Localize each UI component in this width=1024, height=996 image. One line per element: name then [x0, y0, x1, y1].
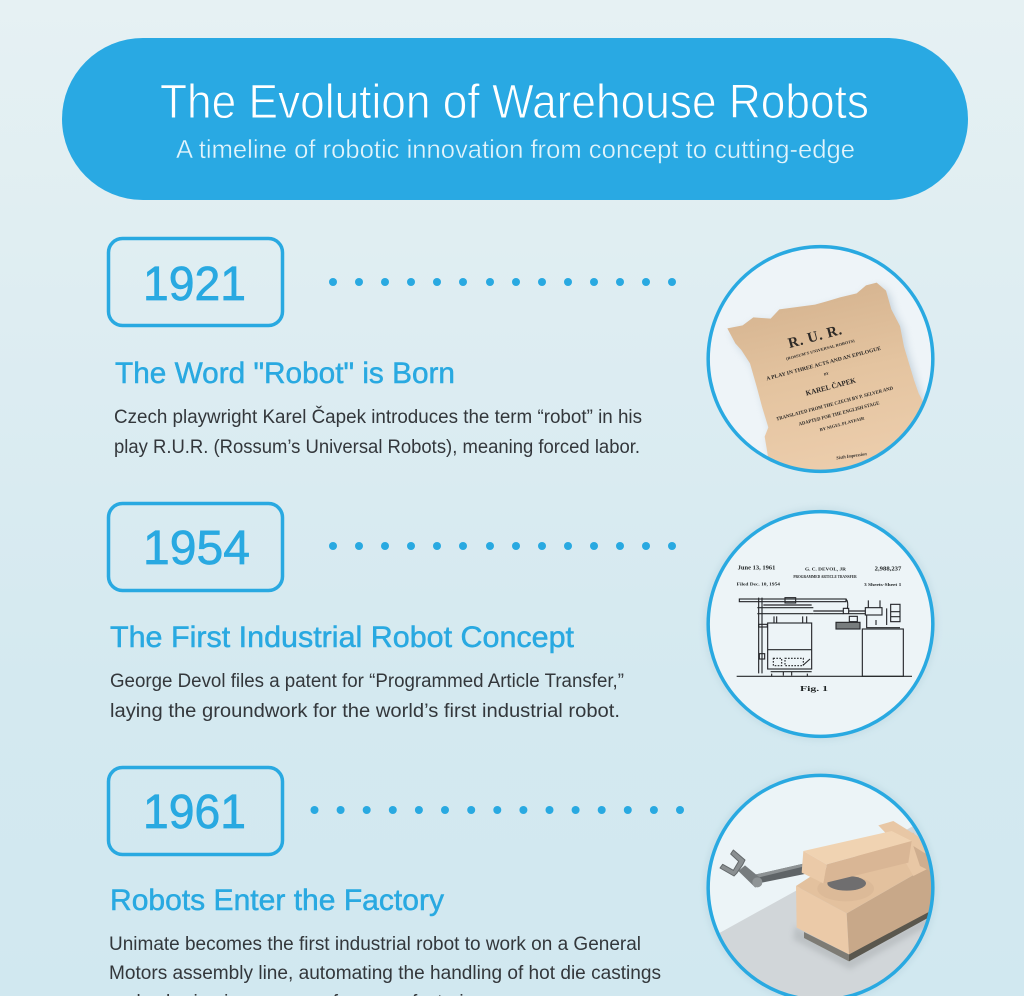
year badge 1921: 1921: [143, 258, 246, 311]
description 1954: [110, 671, 624, 722]
image: R.U.R. title page: [706, 244, 935, 474]
title banner: [62, 38, 968, 200]
image: patent drawing: Filed Dec. 10, 1954: [737, 582, 781, 587]
description 1954: laying the groundwork for the world’s first industrial robot.: [110, 701, 620, 722]
image: R.U.R. title page: ADAPTED FOR THE ENGLISH STAGE: [798, 401, 881, 428]
image: patent drawing: G. C. DEVOL, JR: [805, 567, 847, 572]
dotted connector 1921: [329, 278, 676, 286]
image: patent drawing: June 13, 1961: [738, 566, 775, 572]
dotted connector 1961: [310, 806, 684, 814]
base: [796, 886, 849, 954]
heading 1961: Robots Enter the Factory: [110, 884, 444, 917]
heading 1921: The Word "Robot" is Born: [115, 357, 455, 390]
floor: [713, 826, 940, 996]
description 1954: George Devol files a patent for “Programmed Article Transfer,”: [110, 671, 624, 692]
image: patent drawing: Fig. 1: [800, 684, 829, 693]
image: patent drawing: PROGRAMMED ARTICLE TRANSFER: [793, 574, 857, 579]
description 1921: play R.U.R. (Rossum’s Universal Robots), meaning forced labor.: [114, 437, 640, 458]
image: R.U.R. title page: A PLAY IN THREE ACTS AND AN EPILOGUE: [766, 346, 882, 382]
title: The Evolution of Warehouse Robots: [160, 76, 869, 129]
image: patent drawing: 2,988,237: [875, 565, 902, 572]
year badge 1961: [108, 768, 282, 854]
subtitle: A timeline of robotic innovation from concept to cutting-edge: [176, 134, 855, 164]
image: R.U.R. title page: R. U. R.: [786, 322, 844, 352]
timeline entry: 1921: [108, 238, 963, 483]
image: Unimate robot arm: [703, 770, 940, 996]
plinth: [804, 932, 849, 961]
image: R.U.R. title page: BY: [823, 371, 830, 377]
description 1961: [109, 934, 661, 996]
year badge 1921: [108, 238, 282, 326]
image: R.U.R. title page: KAREL ČAPEK: [804, 375, 857, 398]
image: R.U.R. title page: BY NIGEL PLAYFAIR: [819, 415, 866, 432]
heading 1954: The First Industrial Robot Concept: [110, 621, 575, 654]
year badge 1954: 1954: [143, 522, 250, 575]
timeline entry: 1961: [108, 768, 940, 996]
image: patent drawing: [703, 507, 938, 741]
turntable: [817, 876, 874, 901]
year badge 1961: 1961: [143, 786, 246, 839]
dotted connector 1954: [329, 542, 676, 550]
arm: [803, 831, 912, 864]
description 1961: Unimate becomes the first industrial robot to work on a General: [109, 934, 641, 955]
year badge 1954: [108, 504, 282, 590]
image: patent drawing: 3 Sheets-Sheet 1: [864, 582, 901, 587]
image: R.U.R. title page: TRANSLATED FROM THE CZECH BY P. SELVER AND: [776, 386, 894, 423]
image: R.U.R. title page: (ROSSUM’S UNIVERSAL ROBOTS): [786, 338, 856, 361]
description 1921: Czech playwright Karel Čapek introduces the term “robot” in his: [114, 406, 642, 428]
timeline entry: 1954: [108, 504, 938, 741]
rear block: [878, 821, 926, 876]
description 1961: Motors assembly line, automating the handling of hot die castings: [109, 963, 661, 984]
gripper: [756, 864, 804, 882]
description 1921: [114, 406, 642, 458]
image: R.U.R. title page: Sixth Impression: [836, 452, 867, 461]
